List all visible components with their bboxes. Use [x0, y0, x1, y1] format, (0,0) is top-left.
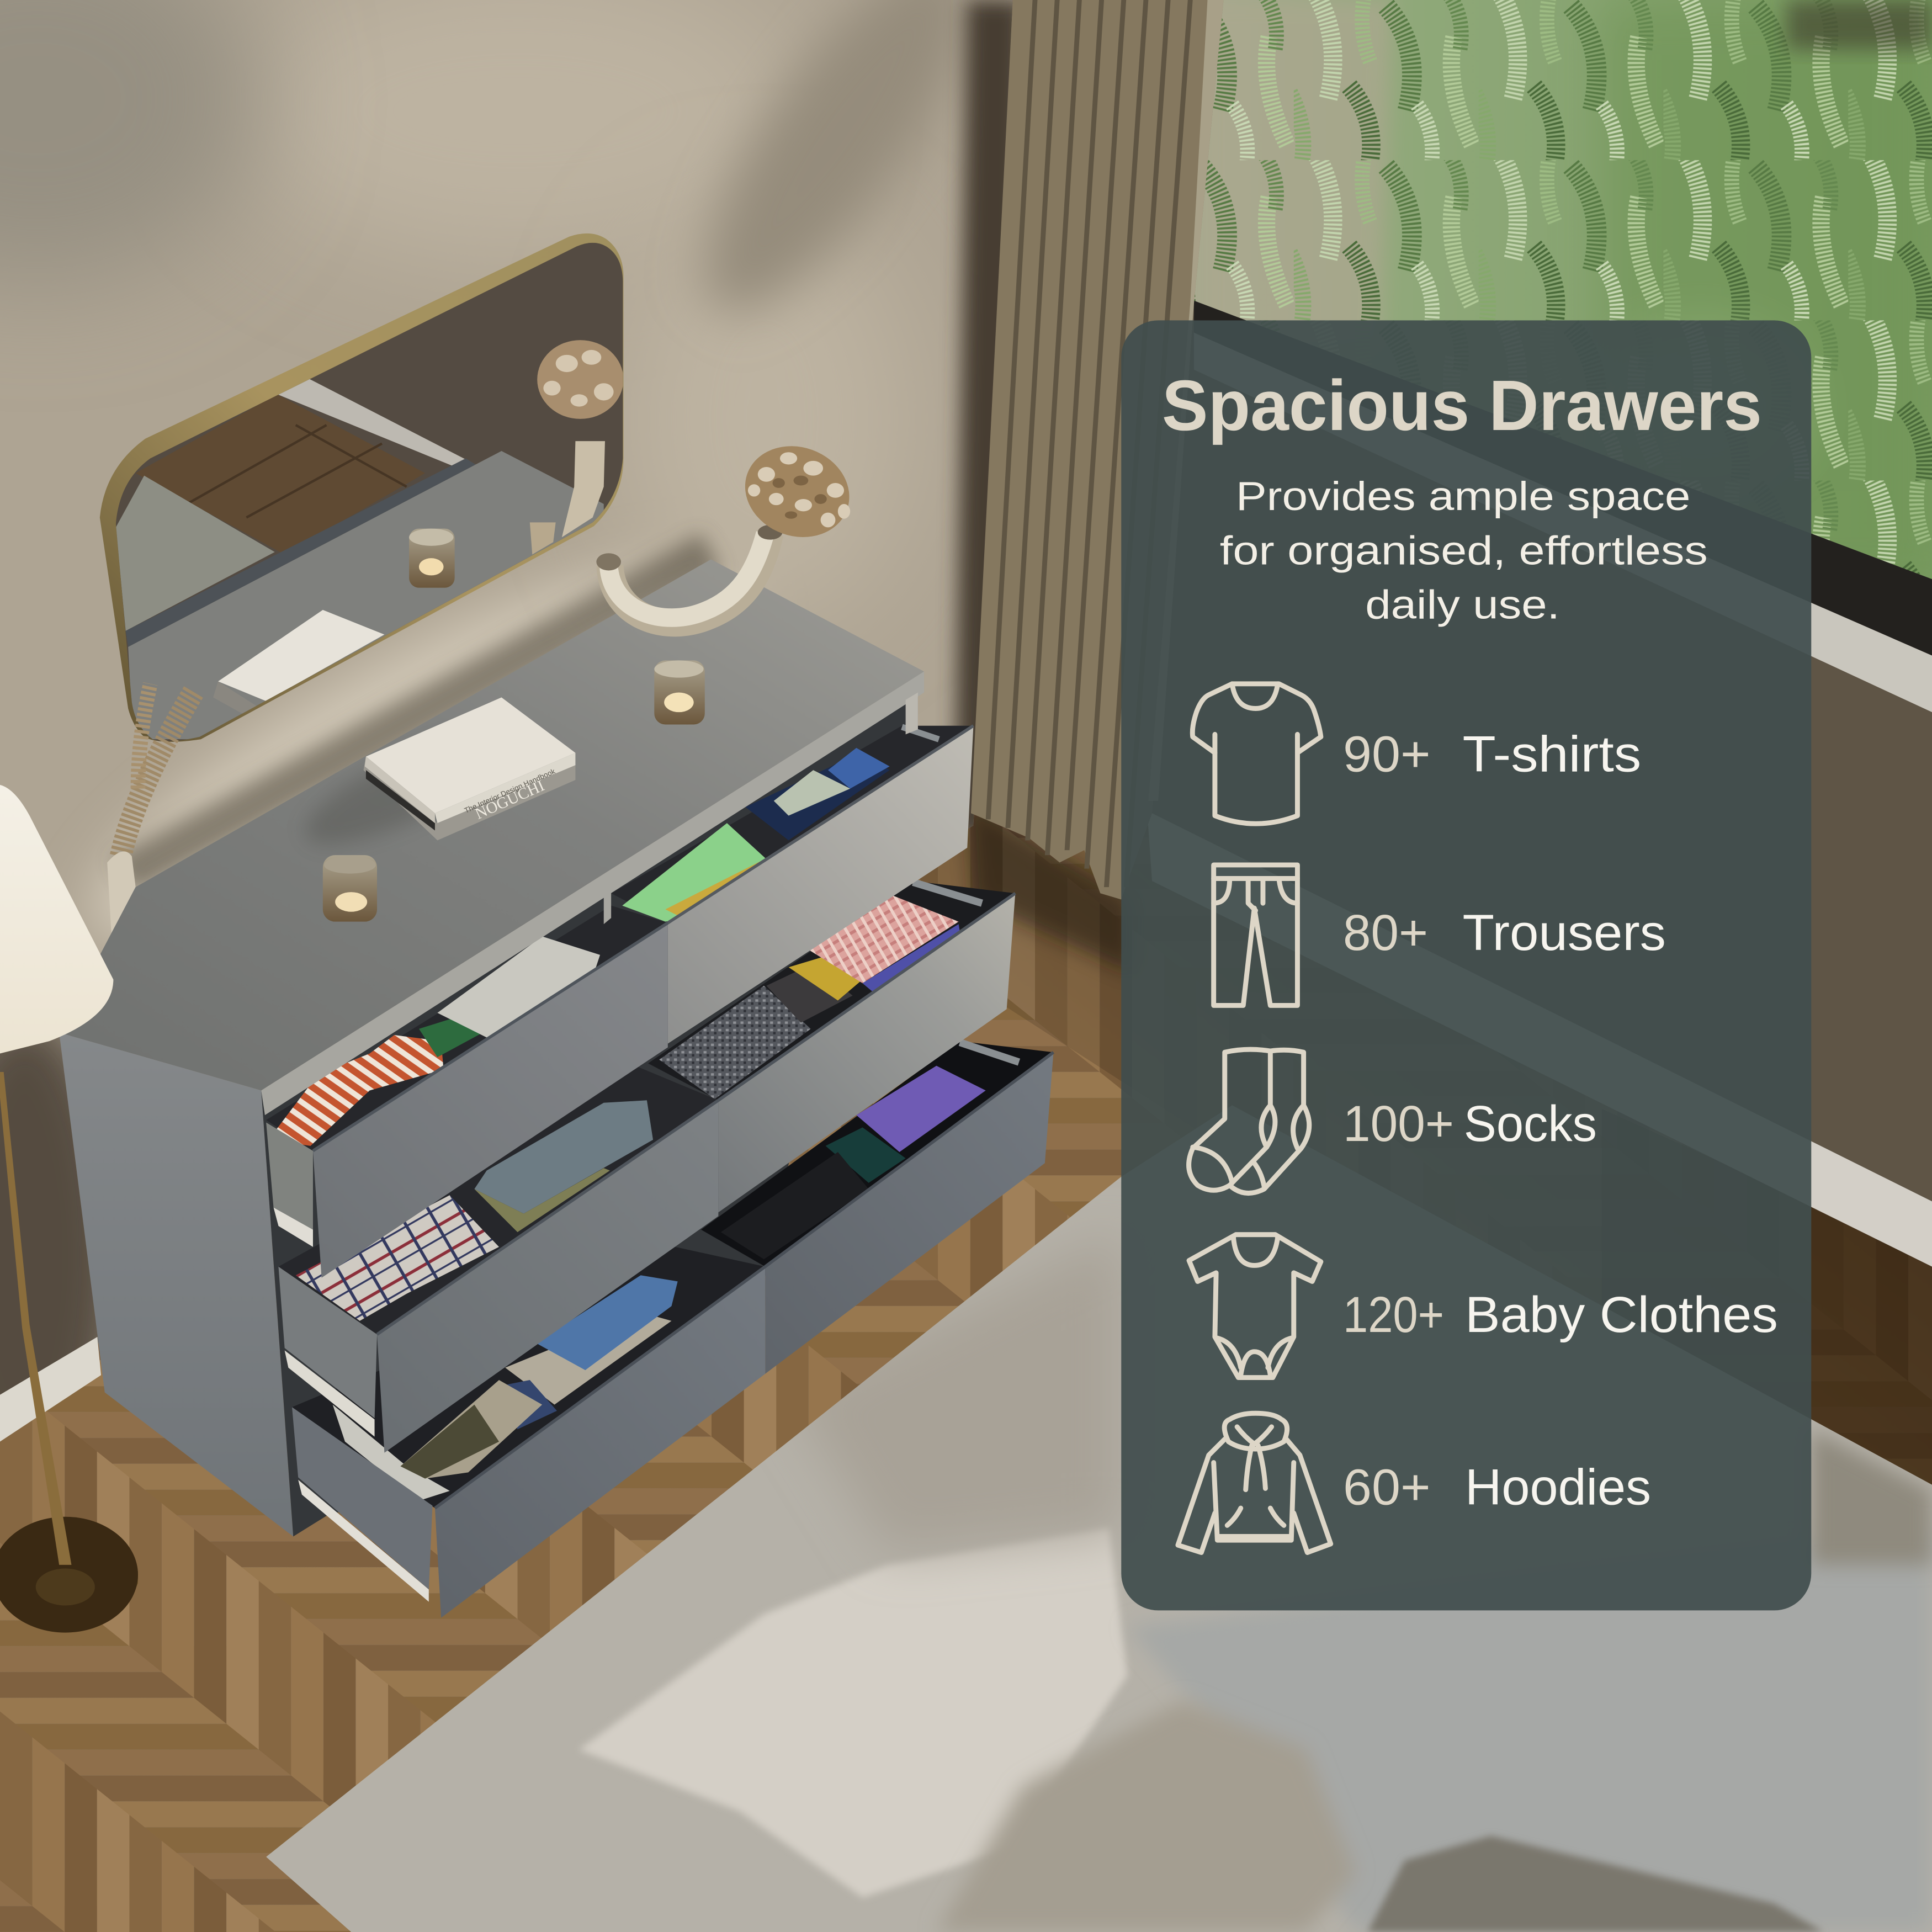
label: Baby Clothes: Baby Clothes	[1465, 1287, 1778, 1343]
reflected vase	[562, 441, 605, 537]
clothes middle left	[296, 1100, 653, 1321]
count: 60+: 60+	[1343, 1459, 1431, 1515]
icon: t-shirt	[1192, 684, 1321, 824]
clothes bottom right	[721, 1066, 986, 1259]
book stack	[363, 697, 575, 840]
count: 100+: 100+	[1343, 1096, 1454, 1152]
bottom right drawer	[701, 1041, 1053, 1374]
rug	[0, 1084, 1932, 1932]
candle right	[654, 660, 705, 724]
dried flower head	[733, 432, 862, 551]
window with foliage	[1194, 0, 1932, 591]
reflected book	[213, 681, 266, 727]
middle right drawer	[648, 881, 1015, 1212]
label: T-shirts: T-shirts	[1463, 726, 1641, 782]
book title: NOGUCHI	[473, 777, 547, 823]
floor lamp	[0, 785, 138, 1633]
panel: spacious drawers	[1121, 320, 1811, 1610]
carcass post right	[906, 692, 918, 734]
dark cavity	[261, 690, 918, 1536]
subtitle: for organised, effortless	[1220, 527, 1708, 573]
icon: hoodie	[1178, 1413, 1331, 1552]
reflected skirting	[277, 378, 476, 468]
subtitle: daily use.	[1365, 582, 1560, 628]
reflected floor	[136, 394, 425, 554]
title: Spacious Drawers	[1162, 366, 1762, 445]
count: 120+: 120+	[1343, 1287, 1444, 1343]
row: t-shirts	[1192, 684, 1641, 824]
subtitle	[1220, 473, 1708, 628]
subtitle: Provides ample space	[1236, 473, 1690, 519]
row: socks	[1189, 1049, 1597, 1193]
label: Trousers: Trousers	[1463, 905, 1666, 961]
row: baby clothes	[1189, 1235, 1778, 1378]
clothes middle right	[659, 893, 961, 1099]
mirrored candle	[409, 529, 455, 588]
curtain	[971, 0, 1224, 899]
middle left drawer	[278, 1067, 718, 1453]
dresser	[59, 559, 1053, 1618]
row: hoodies	[1178, 1413, 1651, 1552]
clothes top left	[269, 936, 600, 1146]
icon: baby bodysuit	[1189, 1235, 1321, 1378]
carcass strut centre	[604, 885, 611, 924]
dresser top surface	[59, 559, 924, 1090]
reflected dresser	[128, 451, 604, 739]
dried grass vase left	[107, 684, 195, 946]
top left drawer	[266, 906, 668, 1278]
icon: trousers	[1214, 865, 1297, 1005]
count: 90+: 90+	[1343, 726, 1431, 782]
top surface shadow	[293, 713, 521, 864]
mirror on wall	[100, 233, 628, 745]
clothes bottom left	[333, 1275, 678, 1501]
reflected rug	[116, 476, 275, 631]
sculptural U vase with dried flowers	[596, 432, 862, 623]
label: Hoodies: Hoodies	[1465, 1459, 1651, 1515]
window frame	[1194, 301, 1932, 656]
book spine text: The Interior Design Handbook	[463, 767, 556, 815]
icon: socks	[1189, 1049, 1309, 1193]
dresser side panel	[59, 1033, 293, 1536]
panel background	[1121, 320, 1811, 1610]
top front edge	[261, 672, 924, 1115]
right wall and sill under window	[1147, 296, 1932, 1267]
bottom left drawer	[292, 1247, 765, 1618]
row: trousers	[1214, 865, 1666, 1005]
plaster wall	[0, 0, 1023, 1503]
candle left	[323, 855, 377, 922]
clothes top right	[622, 748, 890, 922]
skirting board left	[0, 1337, 101, 1442]
count: 80+: 80+	[1343, 905, 1428, 961]
top right drawer	[611, 726, 973, 1044]
label: Socks: Socks	[1464, 1096, 1597, 1152]
